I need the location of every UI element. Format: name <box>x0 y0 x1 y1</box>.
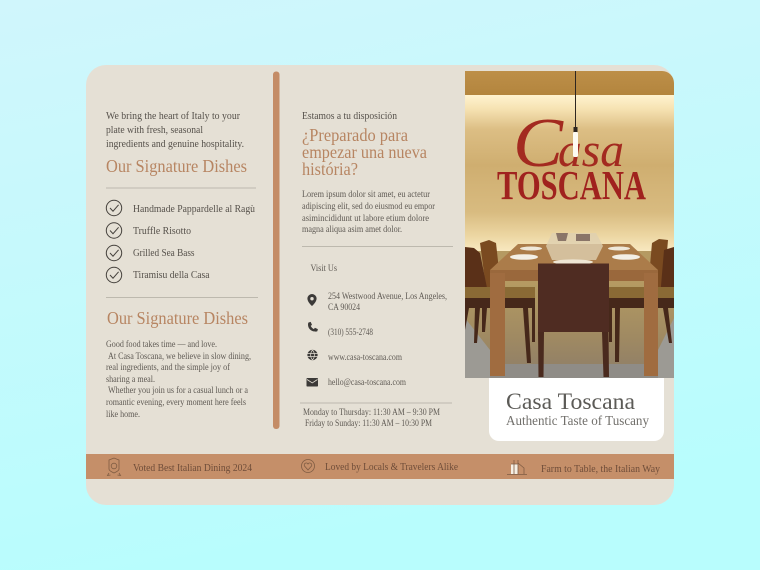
visit us label: Visit Us <box>310 264 337 274</box>
dish list <box>106 200 255 283</box>
restaurant photo <box>465 71 674 378</box>
dish: risotto <box>106 223 191 238</box>
badge: farm to table <box>507 460 661 475</box>
vertical accent bar <box>273 72 280 429</box>
icon: farm building <box>507 460 527 474</box>
intro text: ingredients and genuine hospitality. <box>106 139 244 150</box>
phone row: (310) 555-2748 <box>328 327 373 338</box>
icon: globe <box>307 350 318 360</box>
intro text <box>106 111 244 150</box>
panel: signature dishes <box>106 111 258 420</box>
opening hours: Monday to Thursday: 11:30 AM – 9:30 PM <box>303 408 440 418</box>
dish: tiramisu: Tiramisu della Casa <box>133 270 210 281</box>
email row <box>306 378 406 388</box>
panel: contact <box>300 111 453 429</box>
opening hours <box>303 408 440 429</box>
heading: call to action: história? <box>302 159 358 179</box>
dish: risotto: Truffle Risotto <box>133 226 191 237</box>
table legs <box>490 273 658 376</box>
icon: envelope <box>306 378 318 386</box>
email row: hello@casa-toscana.com <box>328 378 406 388</box>
dish: pappardelle: Handmade Pappardelle al Ragù <box>133 204 255 215</box>
story text: Good food takes time — and love. <box>106 339 217 350</box>
brochure card <box>86 65 674 505</box>
website row <box>307 350 402 363</box>
intro text: We bring the heart of Italy to your <box>106 111 241 122</box>
icon: heart emblem <box>302 460 314 472</box>
icon: phone <box>308 322 318 332</box>
heading: call to action: empezar una nueva <box>302 142 427 162</box>
heading: call to action <box>302 125 427 179</box>
lorem text <box>302 190 436 235</box>
tagline: Authentic Taste of Tuscany <box>506 414 649 429</box>
lorem text: Lorem ipsum dolor sit amet, eu actetur <box>302 190 431 200</box>
lorem text: magna aliqua asim amet dolor. <box>302 225 402 235</box>
website row: www.casa-toscana.com <box>328 353 402 363</box>
address row <box>307 292 447 313</box>
logo script: Casa: asa <box>558 124 624 177</box>
icon: award shield <box>108 458 120 476</box>
dish: pappardelle <box>106 200 255 216</box>
story text: romantic evening, every moment here feels <box>106 397 246 408</box>
badge: locals and travelers <box>302 460 458 473</box>
logo script: Casa: C <box>513 105 564 182</box>
icon: map pin <box>307 294 317 306</box>
dish: sea bass <box>106 245 195 261</box>
dish: sea bass: Grilled Sea Bass <box>133 248 195 259</box>
story text <box>106 339 251 420</box>
address row: 254 Westwood Avenue, Los Angeles, <box>328 292 447 302</box>
story text: At Casa Toscana, we believe in slow dining, <box>108 352 251 362</box>
address row: CA 90024 <box>328 303 360 313</box>
title card <box>489 378 664 441</box>
table settings <box>510 233 640 265</box>
lorem text: asimincididunt ut labore etium dolore <box>302 214 429 224</box>
story text: like home. <box>106 410 140 420</box>
eyebrow: Estamos a tu disposición <box>302 111 397 122</box>
logo script: Casa <box>517 120 622 166</box>
left chairs <box>465 240 535 363</box>
badge: farm to table: Farm to Table, the Italian Way <box>541 464 661 475</box>
lorem text: adipiscing elit, sed do eiusmod eu empor <box>302 202 436 212</box>
intro text: plate with fresh, seasonal <box>106 125 203 136</box>
logo: Toscana: TOSCANA <box>497 162 646 208</box>
brand name: Casa Toscana <box>506 389 635 414</box>
opening hours: Friday to Sunday: 11:30 AM – 10:30 PM <box>305 419 432 429</box>
dish: tiramisu <box>106 267 210 283</box>
heading: call to action: ¿Preparado para <box>302 125 408 145</box>
pendant lamp <box>573 71 578 157</box>
badge: locals and travelers: Loved by Locals & Travelers Alike <box>325 462 458 473</box>
footer band <box>86 454 674 479</box>
table top <box>490 244 658 270</box>
heading: second signature dishes: Our Signature Dishes <box>107 308 248 328</box>
front chair <box>538 264 609 332</box>
story text: Whether you join us for a casual lunch or a <box>108 385 249 396</box>
phone row <box>308 322 373 338</box>
badge: best dining: Voted Best Italian Dining 2024 <box>133 463 253 474</box>
story text: real ingredients, and the simple joy of <box>106 362 231 373</box>
badge: best dining <box>108 458 253 476</box>
heading: signature dishes: Our Signature Dishes <box>106 156 247 176</box>
story text: sharing a meal. <box>106 375 155 385</box>
right chairs <box>609 239 674 362</box>
